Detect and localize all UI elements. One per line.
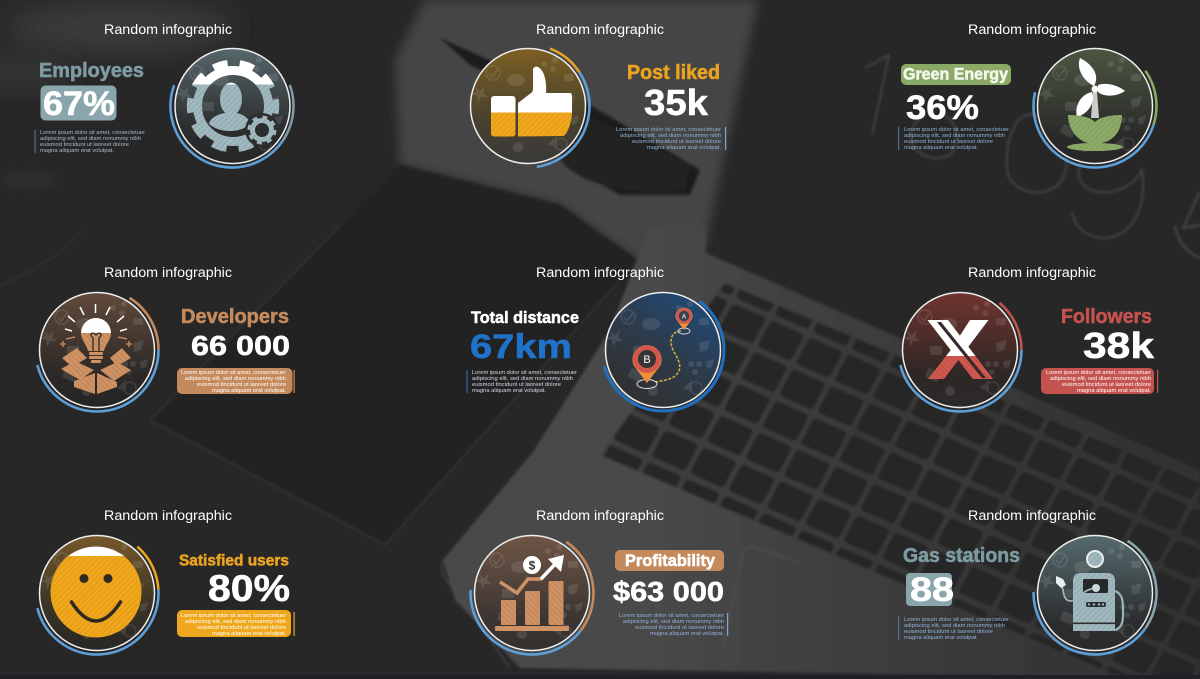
icon: bar chart with rising arrow and coin: $ (529, 558, 536, 572)
circle badge (1038, 536, 1152, 650)
heading: followers: Followers (1061, 306, 1152, 328)
value: 38k: 38k (1083, 325, 1155, 366)
title: Random infographic (104, 22, 232, 37)
circle badge (606, 292, 720, 408)
text block: adipiscing elit, sed diam nonummy nibh (620, 133, 721, 139)
text block (898, 616, 1009, 641)
text block (898, 127, 1009, 151)
value: $63 000: $63 000 (613, 576, 724, 607)
text block: euismod tincidunt ut laoreet dolore (197, 382, 286, 388)
progress ring (146, 20, 318, 192)
circle badge (175, 48, 290, 164)
text block: euismod tincidunt ut laoreet dolore (197, 625, 286, 631)
text block: euismod tincidunt ut laoreet dolore (472, 382, 561, 388)
text block (177, 368, 295, 394)
icon: gear with person (190, 64, 279, 148)
text block: adipiscing elit, sed diam nonummy nibh (904, 623, 1005, 629)
icon: thumbs up (491, 67, 572, 136)
title: Random infographic (536, 508, 664, 523)
panel: post liked (470, 24, 726, 168)
text block: Lorem ipsum dolor sit amet, consectetuer (181, 613, 286, 619)
text block: euismod tincidunt ut laoreet dolore (904, 629, 993, 635)
text block: adipiscing elit, sed diam nonummy nibh (472, 376, 573, 382)
text block: magna aliquam erat volutpat. (40, 148, 114, 154)
circle badge (40, 536, 154, 650)
value: 80%: 80% (208, 568, 290, 609)
value: 67km: 67km (470, 328, 572, 366)
value badge: 88: 88 (910, 571, 954, 609)
text block: adipiscing elit, sed diam nonummy nibh (185, 619, 286, 625)
text block (616, 127, 726, 151)
icon: bar chart with rising arrow and coin (495, 555, 569, 631)
heading: gas stations: Gas stations (903, 545, 1020, 567)
text block: magna aliquam erat volutpat. (904, 145, 978, 151)
text block (177, 610, 295, 637)
title: Random infographic (104, 265, 232, 280)
text block: euismod tincidunt ut laoreet dolore (632, 139, 721, 145)
text block: adipiscing elit, sed diam nonummy nibh (185, 376, 286, 382)
text block: Lorem ipsum dolor sit amet, consectetuer (40, 130, 145, 136)
text block: Lorem ipsum dolor sit amet, consectetuer (616, 127, 721, 133)
progress ring (1009, 20, 1181, 192)
icon: fuel pump (1056, 551, 1123, 631)
panel: followers (899, 267, 1158, 413)
text block: adipiscing elit, sed diam nonummy nibh (904, 133, 1005, 139)
heading: employees: Employees (39, 60, 144, 82)
icon: route with pins A and B (633, 308, 692, 388)
text block: magna aliquam erat volutpat. (904, 635, 978, 641)
value badge: 67%: 67% (43, 85, 115, 123)
circle badge (902, 292, 1018, 408)
text block: adipiscing elit, sed diam nonummy nibh (40, 136, 141, 142)
text block: Lorem ipsum dolor sit amet, consectetuer (181, 370, 286, 376)
text block: euismod tincidunt ut laoreet dolore (1062, 382, 1151, 388)
circle badge (40, 292, 154, 408)
text block: Lorem ipsum dolor sit amet, consectetuer (619, 613, 724, 619)
text block: magna aliquam erat volutpat. (212, 388, 286, 394)
text block: magna aliquam erat volutpat. (647, 145, 721, 151)
panel: profitability (446, 507, 728, 679)
progress ring (446, 507, 618, 679)
progress ring (1009, 507, 1181, 679)
text block: magna aliquam erat volutpat. (1077, 388, 1151, 394)
circle badge (474, 536, 590, 650)
heading: satisfied users: Satisfied users (179, 552, 289, 570)
text block: magna aliquam erat volutpat. (650, 631, 724, 637)
value: 36%: 36% (906, 89, 979, 127)
progress ring (443, 21, 613, 191)
title: Random infographic (968, 22, 1096, 37)
icon: smiley face (50, 546, 142, 638)
panel: gas stations (898, 507, 1181, 679)
progress ring (578, 265, 748, 435)
icon: route with pins A and B: B (643, 354, 651, 366)
text block: magna aliquam erat volutpat. (472, 388, 546, 394)
text block: Lorem ipsum dolor sit amet, consectetuer (904, 617, 1009, 623)
text block (466, 370, 577, 394)
progress ring (10, 506, 184, 679)
progress ring (12, 265, 182, 435)
text block (1041, 368, 1158, 394)
title: Random infographic (968, 265, 1096, 280)
progress ring (873, 263, 1047, 437)
panel: total distance (466, 265, 748, 435)
heading badge: green energy: Green Energy (903, 64, 1009, 84)
value: 66 000: 66 000 (191, 330, 290, 361)
text block: adipiscing elit, sed diam nonummy nibh (623, 619, 724, 625)
text block: euismod tincidunt ut laoreet dolore (904, 139, 993, 145)
title: Random infographic (104, 508, 232, 523)
icon: wind turbine on leaves (1067, 58, 1125, 151)
text block (34, 130, 145, 154)
title: Random infographic (536, 22, 664, 37)
text block: Lorem ipsum dolor sit amet, consectetuer (904, 127, 1009, 133)
title: Random infographic (968, 508, 1096, 523)
title: Random infographic (536, 265, 664, 280)
icon: light bulb in open box (60, 304, 132, 394)
text block (619, 613, 728, 637)
heading: total distance: Total distance (471, 308, 579, 327)
heading: developers: Developers (181, 306, 289, 328)
circle badge (1038, 48, 1152, 164)
panel: developers (36, 267, 295, 413)
panel: employees (34, 24, 295, 169)
circle badge (470, 48, 586, 164)
panel: satisfied users (36, 510, 295, 656)
text block: Lorem ipsum dolor sit amet, consectetuer (1046, 370, 1151, 376)
icon: X logo (928, 320, 993, 379)
panel: green energy (898, 20, 1181, 192)
text block: adipiscing elit, sed diam nonummy nibh (1050, 376, 1151, 382)
text block: Lorem ipsum dolor sit amet, consectetuer (472, 370, 577, 376)
text block: euismod tincidunt ut laoreet dolore (635, 625, 724, 631)
text block: euismod tincidunt ut laoreet dolore (40, 142, 129, 148)
heading badge: profitability: Profitability (625, 551, 716, 570)
text block: magna aliquam erat volutpat. (212, 631, 286, 637)
icon: route with pins A and B: A (682, 314, 687, 320)
value: 35k: 35k (644, 82, 709, 123)
heading: post liked: Post liked (627, 62, 720, 84)
